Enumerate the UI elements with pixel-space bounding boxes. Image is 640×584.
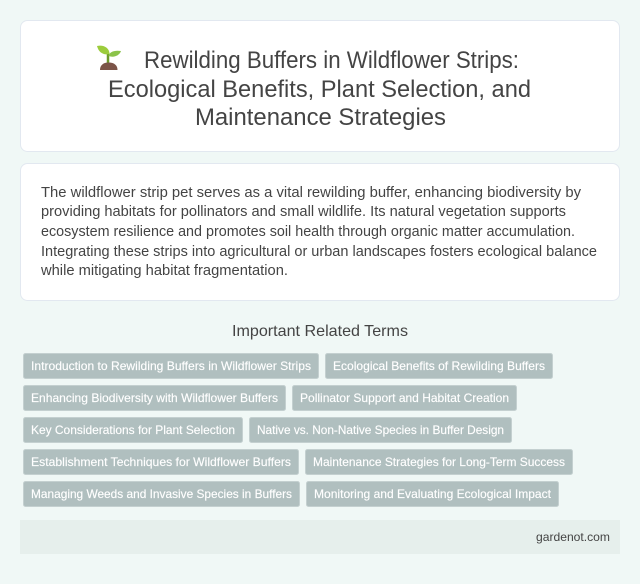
tag: Pollinator Support and Habitat Creation	[300, 391, 509, 405]
panel: description	[20, 164, 620, 300]
tag	[24, 354, 318, 378]
tag	[24, 386, 286, 410]
footer: gardenot.com	[536, 530, 610, 544]
tag: Key Considerations for Plant Selection	[31, 423, 235, 437]
title: Rewilding Buffers in Wildflower Strips:	[144, 47, 519, 74]
tag	[306, 450, 572, 474]
footer	[20, 520, 620, 554]
text block: description: Integrating these strips into agricultural or urban landscapes fosters ecological balance	[41, 244, 597, 260]
tag: Monitoring and Evaluating Ecological Impact	[314, 487, 552, 501]
tag	[250, 418, 512, 442]
tag	[326, 354, 552, 378]
tag: Establishment Techniques for Wildflower Buffers	[31, 455, 291, 469]
tag: Introduction to Rewilding Buffers in Wildflower Strips	[31, 359, 311, 373]
tag: Native vs. Non-Native Species in Buffer Design	[257, 423, 504, 437]
text block: description: ecosystem resilience and promotes soil health through organic matter accumulation.	[41, 224, 575, 240]
tag	[24, 482, 300, 506]
text block: description	[40, 185, 597, 279]
title: Ecological Benefits, Plant Selection, and	[108, 76, 531, 103]
title	[108, 47, 531, 131]
text block: description: The wildflower strip pet serves as a vital rewilding buffer, enhancing biodiversity by	[41, 185, 582, 201]
tag: Ecological Benefits of Rewilding Buffers	[333, 359, 545, 373]
icon: seedling	[97, 46, 121, 70]
tag list	[24, 354, 572, 506]
tag	[292, 386, 516, 410]
tag	[306, 482, 558, 506]
tag: Maintenance Strategies for Long-Term Success	[313, 455, 565, 469]
text block: description: providing habitats for pollinators and small wildlife. Its natural vegetation supports	[41, 204, 566, 220]
text block: description: while mitigating habitat fragmentation.	[40, 263, 288, 279]
heading: related terms: Important Related Terms	[232, 323, 408, 340]
panel: title card	[20, 20, 620, 152]
title: Maintenance Strategies	[195, 104, 446, 131]
tag: Managing Weeds and Invasive Species in Buffers	[31, 487, 292, 501]
tag: Enhancing Biodiversity with Wildflower Buffers	[31, 391, 278, 405]
tag	[24, 450, 298, 474]
tag	[24, 418, 242, 442]
